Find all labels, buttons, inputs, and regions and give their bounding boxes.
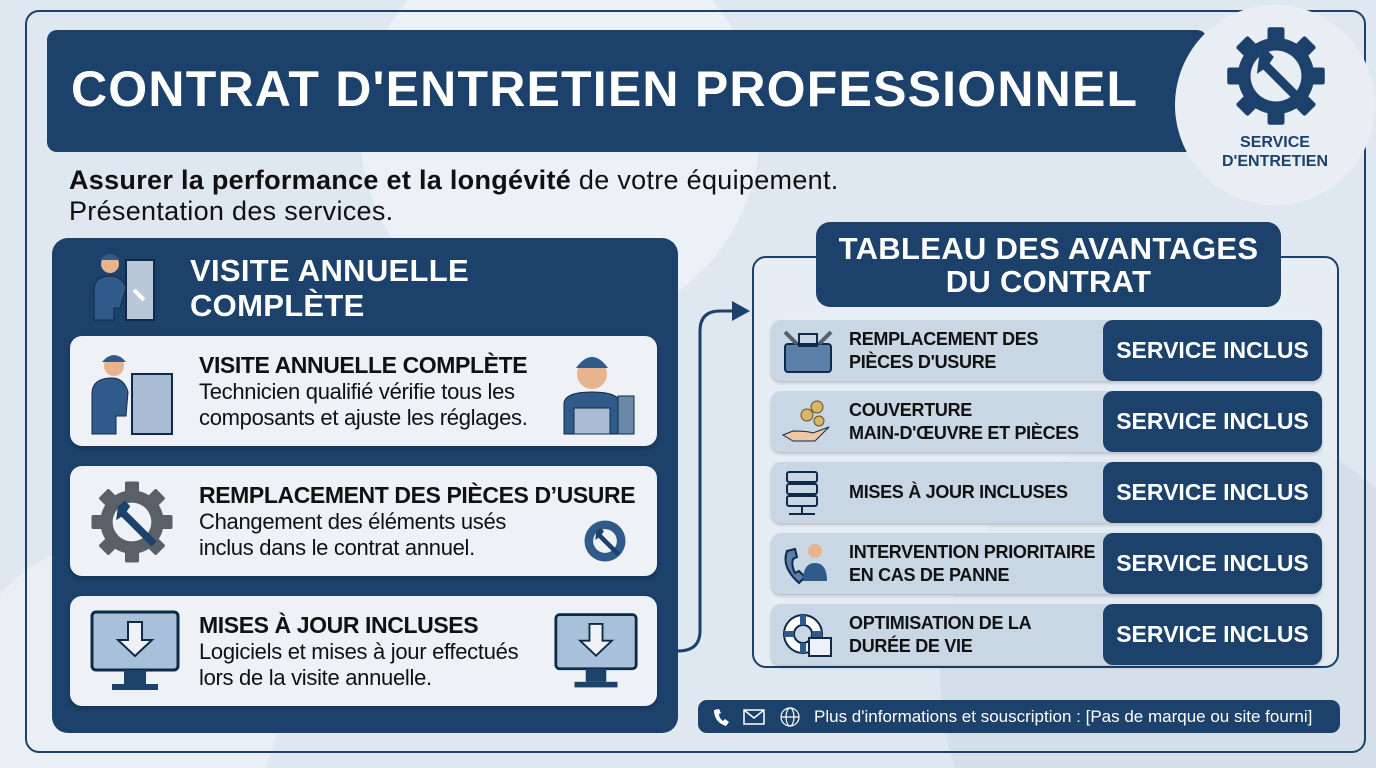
header tab: tableau des avantages: TABLEAU DES AVANTAGES	[839, 231, 1258, 266]
footer: contact bar: Plus d'informations et souscription : [Pas de marque ou site fourni]	[814, 707, 1312, 726]
footer: contact bar	[698, 700, 1340, 733]
logo: service d'entretien: SERVICE	[1240, 134, 1310, 151]
row: mises a jour: MISES À JOUR INCLUSES	[849, 482, 1068, 502]
card: visite annuelle: VISITE ANNUELLE COMPLÈTE	[199, 352, 527, 378]
card: remplacement: Changement des éléments usés	[199, 509, 506, 534]
card: mises a jour: Logiciels et mises à jour effectués	[199, 639, 518, 664]
subtitle	[69, 165, 839, 226]
heading: VISITE ANNUELLE	[190, 253, 469, 288]
panel: left services	[52, 238, 678, 733]
row: mises a jour	[771, 462, 1322, 523]
row: remplacement: PIÈCES D'USURE	[849, 352, 996, 372]
row: intervention	[771, 533, 1322, 594]
row: remplacement: REMPLACEMENT DES	[849, 329, 1038, 349]
row: couverture: COUVERTURE	[849, 400, 972, 420]
header tab: tableau des avantages	[816, 222, 1281, 307]
row: intervention: INTERVENTION PRIORITAIRE	[849, 542, 1095, 562]
title bar: CONTRAT D'ENTRETIEN PROFESSIONNEL	[71, 61, 1138, 117]
row: mises a jour: SERVICE INCLUS	[1116, 479, 1309, 505]
heading	[190, 253, 469, 323]
row: couverture	[771, 391, 1322, 452]
row: couverture: MAIN-D'ŒUVRE ET PIÈCES	[849, 423, 1079, 443]
row: remplacement: SERVICE INCLUS	[1116, 337, 1309, 363]
header tab: tableau des avantages: DU CONTRAT	[946, 264, 1151, 299]
card: visite annuelle: composants et ajuste les réglages.	[199, 405, 528, 430]
row: intervention: EN CAS DE PANNE	[849, 565, 1009, 585]
subtitle: Présentation des services.	[69, 196, 393, 226]
logo: service d'entretien	[1175, 5, 1375, 205]
icon: technician header	[94, 254, 155, 321]
logo: service d'entretien: D'ENTRETIEN	[1222, 153, 1328, 170]
card: visite annuelle	[70, 336, 657, 446]
row: intervention: SERVICE INCLUS	[1116, 550, 1309, 576]
heading: COMPLÈTE	[190, 288, 365, 323]
card: mises a jour	[70, 596, 657, 706]
card: remplacement: inclus dans le contrat annuel.	[199, 535, 475, 560]
subtitle: Assurer la performance et la longévité de votre équipement.	[69, 165, 839, 195]
arrow: to table	[678, 301, 750, 652]
title bar	[47, 30, 1207, 152]
row: optimisation	[771, 604, 1322, 665]
row: optimisation: SERVICE INCLUS	[1116, 621, 1309, 647]
row: optimisation: DURÉE DE VIE	[849, 636, 972, 656]
row: remplacement	[771, 320, 1322, 381]
card: remplacement: REMPLACEMENT DES PIÈCES D’USURE	[199, 482, 635, 508]
row: couverture: SERVICE INCLUS	[1116, 408, 1309, 434]
card: mises a jour: lors de la visite annuelle.	[199, 665, 432, 690]
card: mises a jour: MISES À JOUR INCLUSES	[199, 612, 478, 638]
card: visite annuelle: Technicien qualifié vérifie tous les	[199, 379, 515, 404]
card: remplacement	[70, 466, 657, 576]
panel: table des avantages	[752, 256, 1339, 668]
row: optimisation: OPTIMISATION DE LA	[849, 613, 1031, 633]
